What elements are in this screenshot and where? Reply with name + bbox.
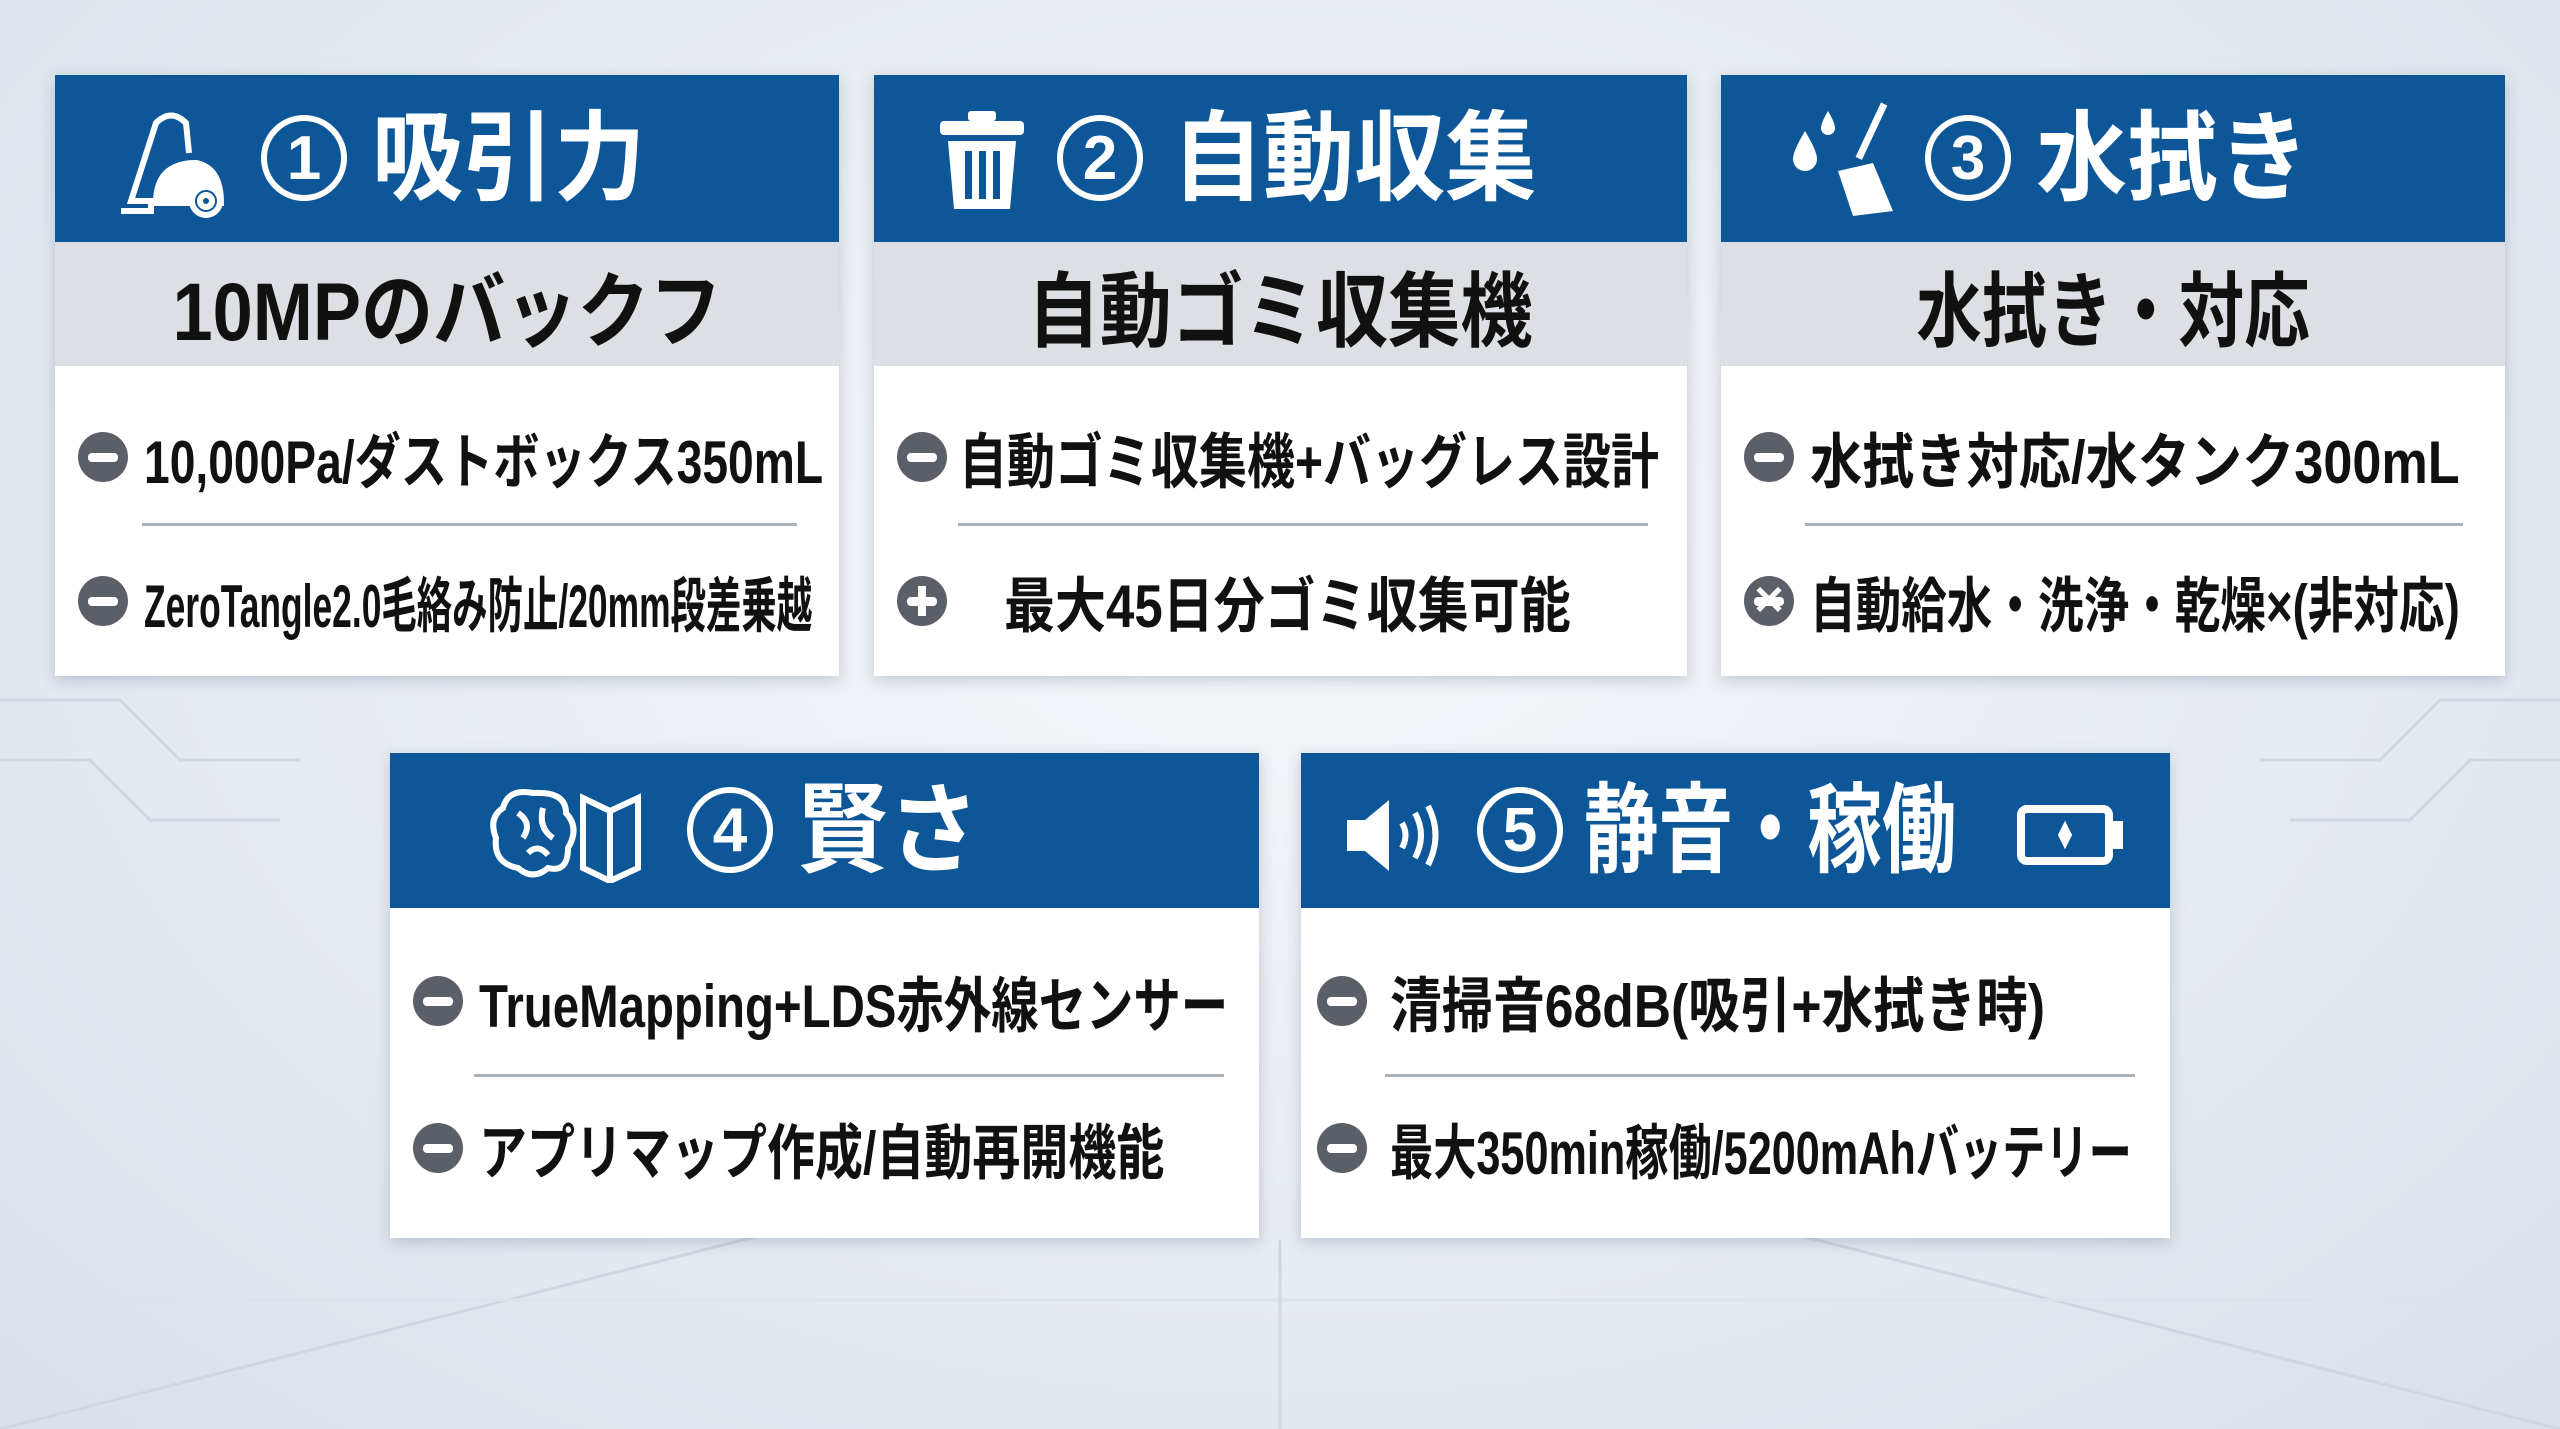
subtitle: 自動ゴミ収集機 (1028, 266, 1533, 358)
header: 吸引力 (55, 75, 839, 242)
title: 吸引力 (372, 103, 645, 213)
icon: trash (940, 111, 1024, 209)
title: 賢さ (797, 775, 979, 885)
row 2: ZeroTangle2.0毛絡み防止/20mm段差乗越 (144, 572, 812, 640)
icon: speaker (1347, 800, 1438, 871)
number 4: 4 (713, 796, 747, 864)
subtitle (55, 242, 839, 366)
panel: 5 quiet and runtime (1301, 753, 2170, 1238)
panel: 4 smart (390, 753, 1259, 1238)
icon: brain and map (490, 789, 641, 883)
row 1: 10,000Pa/ダストボックス350mL (144, 428, 823, 496)
header: 自動収集 (874, 75, 1687, 242)
number 4 (687, 787, 773, 873)
title: 水拭き (2036, 103, 2309, 213)
number 3 (1925, 115, 2011, 201)
number 1: 1 (287, 124, 321, 192)
header: 賢さ (390, 753, 1259, 908)
row 1: 自動ゴミ収集機+バッグレス設計 (959, 428, 1659, 496)
title: 静音・稼働 (1584, 775, 1956, 885)
icon: battery (2017, 805, 2123, 865)
number 2 (1057, 115, 1143, 201)
row 2: 最大45日分ゴミ収集可能 (1004, 572, 1571, 640)
header: 水拭き (1721, 75, 2505, 242)
row 1: TrueMapping+LDS赤外線センサー (479, 972, 1228, 1040)
number 5: 5 (1503, 796, 1537, 864)
icon: vacuum (121, 112, 224, 218)
row 2: 自動給水・洗浄・乾燥×(非対応) (1810, 572, 2460, 640)
title: 自動収集 (1172, 103, 1537, 213)
row 2: アプリマップ作成/自動再開機能 (479, 1120, 1164, 1186)
number 1 (261, 115, 347, 201)
row 1: 水拭き対応/水タンク300mL (1810, 428, 2460, 496)
number 2: 2 (1083, 124, 1117, 192)
row 2: 最大350min稼働/5200mAhバッテリー (1390, 1120, 2132, 1186)
header: 静音・稼働 (1301, 753, 2170, 908)
subtitle: 10MPのバックフ (172, 266, 722, 358)
number 5 (1477, 787, 1563, 873)
subtitle: 水拭き・対応 (1916, 266, 2310, 358)
panel: 3 mopping (1721, 75, 2505, 676)
subtitle (1721, 242, 2505, 366)
row 1: 清掃音68dB(吸引+水拭き時) (1390, 972, 2045, 1040)
subtitle (874, 242, 1687, 366)
row 2: ✕ (1752, 579, 1786, 623)
icon: drops and brush (1793, 102, 1893, 216)
panel: 1 suction (55, 75, 839, 676)
panel: 2 auto empty (874, 75, 1687, 676)
number 3: 3 (1951, 124, 1985, 192)
